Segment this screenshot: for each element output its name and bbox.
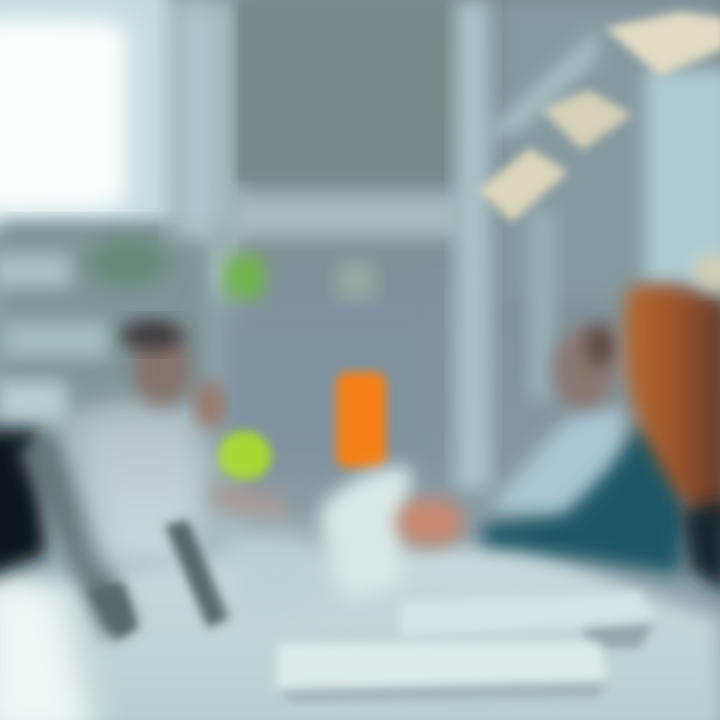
window pillar <box>176 0 220 290</box>
right column <box>528 210 556 400</box>
hand <box>396 498 464 546</box>
right window panel <box>645 70 720 285</box>
left dark chair <box>0 430 135 640</box>
paper on the table <box>215 525 330 625</box>
laptop <box>88 520 230 640</box>
foreground woman hair <box>624 285 720 595</box>
torso <box>72 404 207 575</box>
table <box>0 545 720 720</box>
raised hand <box>196 381 224 429</box>
horizontal light band on wall <box>230 194 460 238</box>
wall lower panel <box>215 300 450 470</box>
light shirt <box>490 408 625 520</box>
bright window <box>0 0 225 256</box>
forearm <box>210 480 285 525</box>
central column <box>455 0 491 490</box>
light at right edge <box>694 254 720 290</box>
ceiling light rail <box>480 28 600 140</box>
left shelves and desks <box>0 236 210 420</box>
orange object <box>336 372 386 468</box>
woman on right <box>396 323 685 575</box>
papers on the table <box>276 592 655 702</box>
white center object <box>320 467 412 598</box>
faint wall icon <box>338 262 374 298</box>
her hair <box>585 323 615 367</box>
hair <box>120 320 184 350</box>
man on left <box>72 320 285 575</box>
green wall accent <box>226 256 264 298</box>
head <box>554 328 614 412</box>
ceiling lights <box>478 12 720 222</box>
teal jacket <box>482 425 685 575</box>
head <box>132 330 192 406</box>
lime green object <box>217 431 271 481</box>
